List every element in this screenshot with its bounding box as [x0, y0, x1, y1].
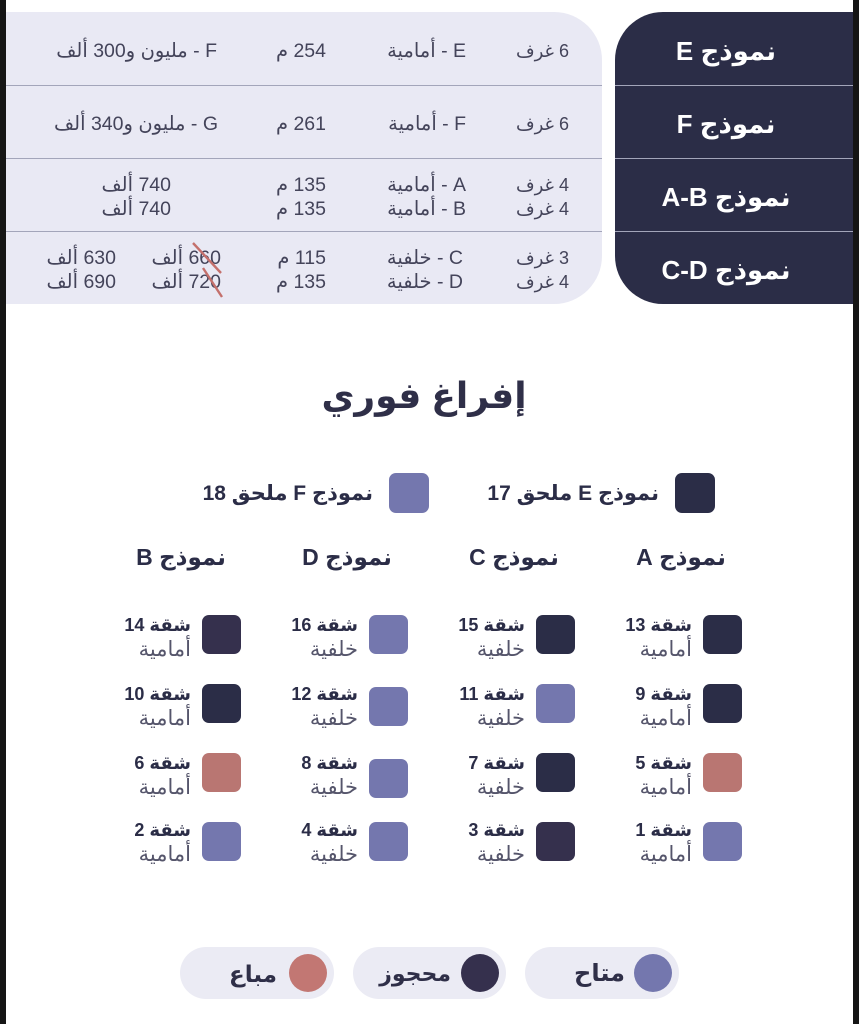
annex unit: F 18: نموذج F ملحق 18	[203, 482, 373, 505]
table row: models C-D: D - خلفية	[387, 271, 463, 293]
unit 16: شقة 16	[291, 615, 358, 635]
table row: model E: E - أمامية	[387, 40, 466, 62]
unit 7: شقة 7	[468, 753, 525, 773]
unit 12	[291, 684, 408, 730]
unit 8: خلفية	[310, 776, 358, 799]
table row: model F: 261 م	[276, 113, 326, 135]
label: model F: نموذج F	[677, 109, 775, 139]
unit 16: خلفية	[310, 638, 358, 661]
legend: available: متاح	[574, 960, 625, 987]
unit 10: أمامية	[139, 707, 191, 730]
table row: model F	[54, 110, 569, 135]
table row: models A-B: 135 م	[276, 174, 326, 196]
table row: models C-D: 115 م	[277, 247, 326, 269]
unit 12: شقة 12	[291, 684, 358, 704]
table row: models C-D: 720 ألف	[151, 271, 221, 293]
annex unit: F 18	[203, 473, 429, 513]
legend: reserved	[353, 947, 506, 999]
unit 7: خلفية	[477, 776, 525, 799]
unit 11: شقة 11	[459, 684, 525, 704]
unit 2: أمامية	[139, 843, 191, 866]
unit 14: أمامية	[139, 638, 191, 661]
unit 7	[468, 753, 575, 799]
unit 9	[635, 684, 742, 730]
column heading: C: نموذج C	[469, 544, 559, 570]
annex unit: E 17	[487, 473, 715, 513]
unit 1	[635, 820, 742, 866]
left screen edge	[0, 0, 6, 1024]
unit 1: أمامية	[640, 843, 692, 866]
unit 11	[459, 684, 575, 730]
table row: models A-B	[101, 172, 569, 220]
column heading: A: نموذج A	[636, 544, 726, 570]
strikethrough marks on old prices	[192, 242, 223, 298]
unit 3: خلفية	[477, 843, 525, 866]
unit 11: خلفية	[477, 707, 525, 730]
unit 3: شقة 3	[468, 820, 525, 840]
table row: models A-B: 4 غرف	[516, 175, 569, 195]
table row: models C-D: 4 غرف	[516, 272, 569, 292]
label: model C-D: نموذج C-D	[661, 255, 791, 285]
unit 6: شقة 6	[134, 753, 191, 773]
unit 15	[458, 615, 575, 661]
unit 5: أمامية	[640, 776, 692, 799]
table row: models C-D	[46, 244, 569, 293]
unit 13	[625, 615, 742, 661]
unit 3	[468, 820, 575, 866]
right screen edge	[853, 0, 859, 1024]
table row: models C-D: C - خلفية	[387, 247, 463, 269]
unit 4	[301, 820, 408, 866]
table row: model F: 6 غرف	[516, 114, 569, 134]
table row: models C-D: 690 ألف	[46, 271, 116, 293]
table row: models A-B: 4 غرف	[516, 199, 569, 219]
unit 9: شقة 9	[635, 684, 692, 704]
table row: model E	[56, 38, 569, 62]
unit 14: شقة 14	[124, 615, 191, 635]
unit 10: شقة 10	[124, 684, 191, 704]
unit 15: خلفية	[477, 638, 525, 661]
table row: models A-B: 135 م	[276, 198, 326, 220]
table row: models C-D: 3 غرف	[516, 248, 569, 268]
unit 9: أمامية	[640, 707, 692, 730]
table row: models C-D: 660 ألف	[151, 247, 221, 269]
unit 13: أمامية	[640, 638, 692, 661]
unit 2: شقة 2	[134, 820, 191, 840]
unit 1: شقة 1	[635, 820, 692, 840]
unit 15: شقة 15	[458, 615, 525, 635]
legend: reserved: محجوز	[379, 961, 451, 986]
label: model E: نموذج E	[676, 36, 776, 66]
panel: model names	[615, 12, 853, 304]
table row: models A-B: 740 ألف	[101, 198, 171, 220]
unit 14	[124, 615, 241, 661]
table row: model E: F - مليون و300 ألف	[56, 40, 217, 62]
annex unit: E 17: نموذج E ملحق 17	[487, 482, 659, 505]
table row: model F: G - مليون و340 ألف	[54, 113, 218, 135]
unit 2	[134, 820, 241, 866]
legend: sold	[180, 947, 334, 999]
table row: model E: 6 غرف	[516, 41, 569, 61]
unit 13: شقة 13	[625, 615, 692, 635]
legend: sold: مباع	[229, 961, 277, 987]
table row: models C-D: 630 ألف	[46, 247, 116, 269]
panel: specifications table	[6, 12, 602, 304]
title: إفراغ فوري	[321, 375, 527, 416]
unit 4: شقة 4	[301, 820, 358, 840]
unit 6	[134, 753, 241, 799]
unit 8: شقة 8	[301, 753, 358, 773]
unit 4: خلفية	[310, 843, 358, 866]
table row: models A-B: 740 ألف	[101, 174, 171, 196]
column heading: D: نموذج D	[302, 544, 392, 570]
label: model A-B: نموذج A-B	[661, 182, 791, 212]
unit 12: خلفية	[310, 707, 358, 730]
column heading: B: نموذج B	[136, 544, 226, 570]
table row: model F: F - أمامية	[388, 113, 466, 135]
unit 5: شقة 5	[635, 753, 692, 773]
table row: models A-B: B - أمامية	[387, 198, 466, 220]
unit 8	[301, 753, 408, 799]
unit 5	[635, 753, 742, 799]
unit 6: أمامية	[139, 776, 191, 799]
table row: models A-B: A - أمامية	[387, 174, 466, 196]
table row: model E: 254 م	[276, 40, 326, 62]
legend: available	[525, 947, 679, 999]
unit 10	[124, 684, 241, 730]
unit 16	[291, 615, 408, 661]
table row: models C-D: 135 م	[276, 271, 326, 293]
